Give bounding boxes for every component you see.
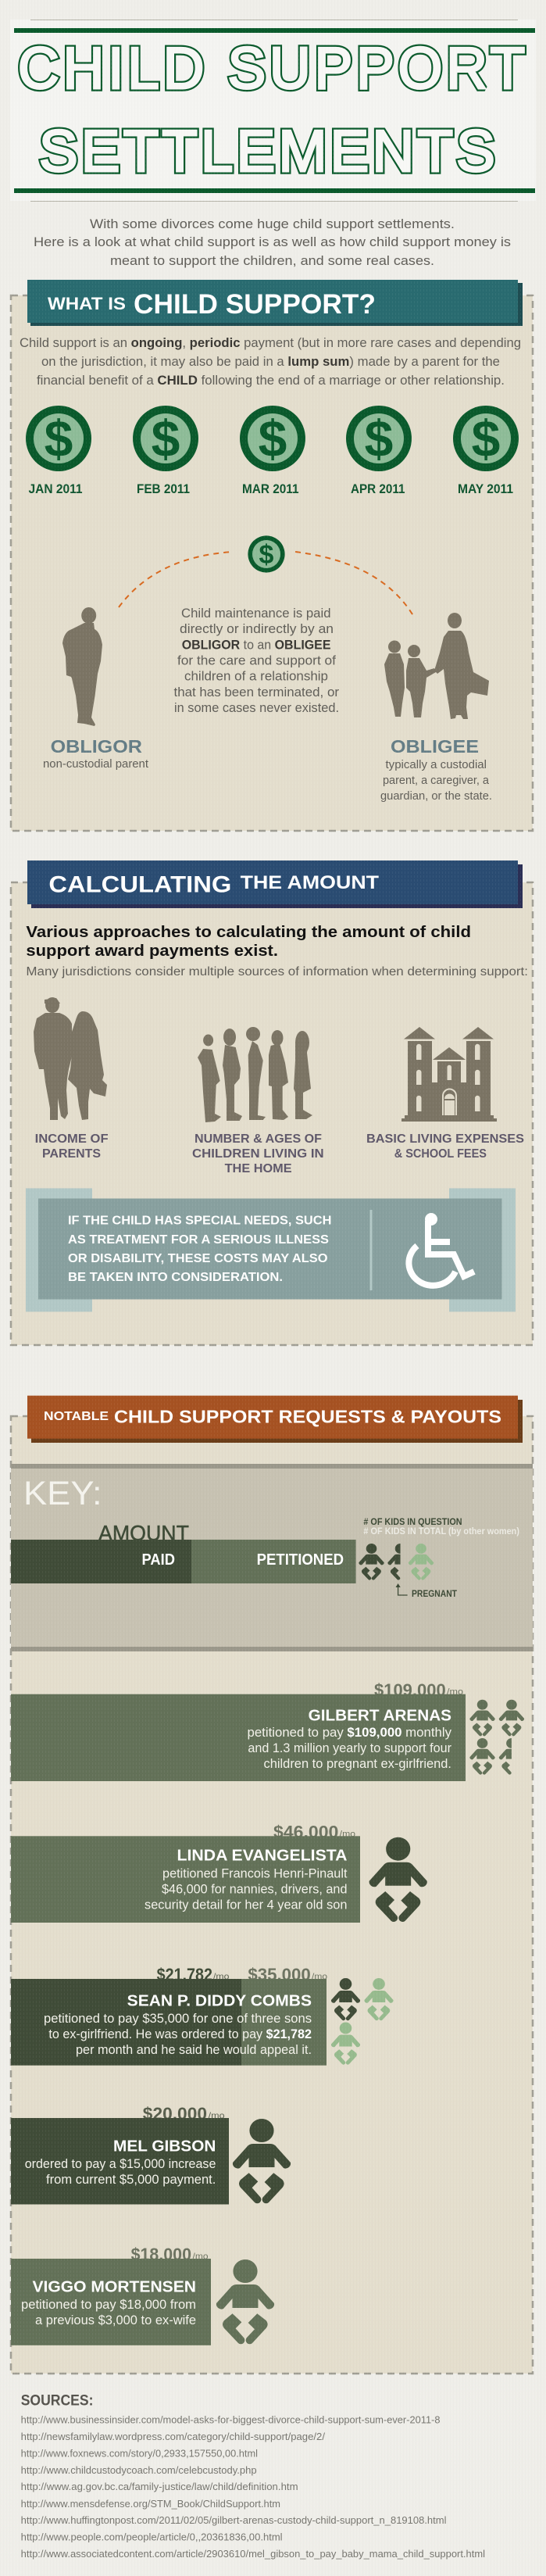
heading: notable payouts: CHILD SUPPORT REQUESTS & PAYOUTS — [114, 1407, 501, 1427]
case: mel gibson — [11, 2104, 291, 2204]
case: viggo mortensen: /mo — [192, 2252, 208, 2262]
pregnant callout — [395, 1583, 458, 1599]
callout: special needs — [26, 1188, 516, 1311]
key bar: PAID — [142, 1551, 175, 1569]
key bar — [11, 1540, 356, 1583]
definition text: on the jurisdiction, it may also be paid in a lump sum) made by a parent for the — [41, 355, 500, 369]
text: approaches: Various approaches to calculating the amount of child — [26, 924, 471, 941]
case: sean p. diddy combs: to ex-girlfriend. He was ordered to pay $21,782 — [48, 2027, 312, 2041]
title banner: SETTLEMENTS — [39, 118, 498, 184]
text: child maintenance: OBLIGOR to an OBLIGEE — [182, 638, 331, 652]
intro text: With some divorces come huge child support settlements. — [90, 216, 455, 231]
sources: http://www.childcustodycoach.com/celebcustody.php — [21, 2465, 257, 2476]
key babies — [359, 1544, 434, 1580]
icon: wheelchair — [409, 1213, 474, 1286]
case: linda evangelista: $46,000 for nannies, drivers, and — [162, 1882, 347, 1896]
case: linda evangelista: petitioned Francois Henri-Pinault — [162, 1866, 348, 1880]
title banner: CHILD SUPPORT — [18, 35, 529, 101]
labels: factors: & SCHOOL FEES — [394, 1147, 487, 1161]
definition text — [20, 336, 521, 388]
label: obligor: non-custodial parent — [43, 758, 148, 771]
key legend text: # OF KIDS IN TOTAL (by other women) — [363, 1526, 519, 1537]
sources: http://www.huffingtonpost.com/2011/02/05/gilbert-arenas-custody-child-support_n_819108.html — [21, 2515, 446, 2526]
label: obligee: guardian, or the state. — [380, 790, 492, 803]
text: child maintenance: children of a relationship — [184, 669, 328, 683]
text: child maintenance: directly or indirectly by an — [180, 622, 334, 636]
text: child maintenance: for the care and support of — [177, 653, 336, 667]
icon: obligor silhouette — [62, 607, 102, 726]
icon: baby — [369, 1837, 427, 1922]
icon: coin february — [133, 406, 198, 471]
intro text — [34, 216, 511, 268]
title banner — [10, 20, 536, 202]
label: obligee: typically a custodial — [386, 759, 487, 771]
month labels: JAN 2011 — [28, 482, 83, 496]
label: obligee: OBLIGEE — [391, 736, 479, 757]
case: linda evangelista: /mo — [340, 1830, 355, 1839]
icon: three babies — [331, 1978, 394, 2065]
icon: house — [401, 1027, 497, 1122]
label: obligor — [43, 736, 148, 771]
icon: small coin — [248, 535, 285, 573]
definition text: financial benefit of a CHILD following the end of a marriage or other relationship. — [37, 374, 505, 388]
title banner: CHILD SUPPORT — [18, 35, 529, 101]
case: gilbert arenas: and 1.3 million yearly to support four — [248, 1741, 451, 1755]
key legend text: # OF KIDS IN QUESTION — [363, 1516, 462, 1527]
heading: notable payouts: NOTABLE — [44, 1410, 109, 1423]
arrow: payment arc right — [295, 552, 415, 618]
sources: http://www.ag.gov.bc.ca/family-justice/law/child/definition.htm — [21, 2481, 298, 2492]
icon: small coin: $ — [259, 540, 274, 570]
case: gilbert arenas — [11, 1680, 524, 1781]
labels: factors: INCOME OF — [35, 1132, 109, 1146]
case: gilbert arenas: petitioned to pay $109,000 monthly — [247, 1726, 452, 1740]
icon: coin march — [240, 406, 305, 471]
case: sean p. diddy combs: per month and he said he would appeal it. — [76, 2043, 312, 2057]
heading: calculating the amount — [27, 860, 523, 908]
icon: coin january — [26, 406, 91, 471]
case: mel gibson: ordered to pay a $15,000 increase — [25, 2157, 216, 2171]
case: sean p. diddy combs: petitioned to pay $35,000 for one of three sons — [44, 2012, 312, 2026]
case: gilbert arenas: /mo — [447, 1687, 463, 1697]
callout: special needs: IF THE CHILD HAS SPECIAL NEEDS, SUCH — [68, 1215, 331, 1227]
case: gilbert arenas: children to pregnant ex-girlfriend. — [264, 1757, 451, 1771]
panel: notable requests and payouts — [11, 1396, 533, 2374]
case: linda evangelista: LINDA EVANGELISTA — [177, 1848, 347, 1865]
callout: special needs: BE TAKEN INTO CONSIDERATION. — [68, 1271, 283, 1284]
labels: factors — [35, 1132, 524, 1175]
text: child maintenance: Child maintenance is paid — [181, 606, 331, 621]
icon: obligee silhouette — [384, 613, 489, 719]
icon: parents silhouette — [34, 997, 107, 1120]
icon: baby — [233, 2119, 291, 2203]
month labels: MAR 2011 — [242, 482, 298, 496]
intro text: Here is a look at what child support is as well as how child support money is — [34, 234, 511, 249]
case: sean p. diddy combs: $21,782 — [157, 1965, 212, 1984]
labels: factors: THE HOME — [225, 1162, 292, 1175]
heading: what is child support: WHAT IS — [48, 294, 126, 313]
callout: special needs: AS TREATMENT FOR A SERIOUS ILLNESS — [68, 1233, 329, 1247]
case: gilbert arenas: $109,000 — [374, 1680, 446, 1700]
text: approaches — [26, 924, 528, 979]
case: sean p. diddy combs: $35,000 — [248, 1965, 311, 1984]
case: sean p. diddy combs: /mo — [312, 1973, 327, 1982]
case: sean p. diddy combs: /mo — [213, 1973, 229, 1982]
month labels: MAY 2011 — [458, 482, 513, 496]
icon: children silhouettes — [198, 1027, 312, 1122]
sources — [21, 2393, 485, 2560]
icon: four babies — [469, 1700, 524, 1775]
key panel: KEY: — [23, 1475, 102, 1512]
heading: what is child support: CHILD SUPPORT? — [134, 289, 376, 320]
key bar: PETITIONED — [257, 1551, 344, 1569]
sources: http://www.mensdefense.org/STM_Book/ChildSupport.htm — [21, 2499, 280, 2510]
pregnant callout: PREGNANT — [412, 1588, 458, 1599]
heading: calculating the amount: THE AMOUNT — [241, 872, 379, 893]
text: child maintenance — [173, 606, 340, 715]
case: mel gibson: from current $5,000 payment. — [46, 2173, 216, 2187]
case: sean p. diddy combs: SEAN P. DIDDY COMBS — [127, 1993, 312, 2010]
text: approaches: support award payments exist. — [26, 943, 278, 960]
case: viggo mortensen: a previous $3,000 to ex-wife — [35, 2313, 196, 2327]
case: viggo mortensen: $18,000 — [131, 2245, 191, 2264]
label: obligee: parent, a caregiver, a — [383, 775, 490, 787]
month labels — [28, 482, 513, 496]
case: linda evangelista: $46,000 — [273, 1823, 338, 1841]
key panel — [11, 1464, 533, 1651]
month labels: FEB 2011 — [137, 482, 190, 496]
sources: SOURCES: — [21, 2393, 94, 2410]
icon: baby — [216, 2259, 274, 2344]
case: linda evangelista: security detail for her 4 year old son — [145, 1898, 347, 1912]
case: viggo mortensen — [11, 2245, 274, 2345]
heading: calculating the amount: CALCULATING — [48, 872, 231, 898]
icon: coin may — [453, 406, 519, 471]
sources: http://www.businessinsider.com/model-asks-for-biggest-divorce-child-support-sum-ever-2011-8 — [21, 2415, 441, 2426]
labels: factors: BASIC LIVING EXPENSES — [366, 1132, 524, 1146]
text: child maintenance: in some cases never existed. — [174, 701, 339, 715]
text: child maintenance: that has been terminated, or — [173, 685, 340, 699]
icon: coin april — [346, 406, 412, 471]
case: mel gibson: /mo — [209, 2112, 225, 2121]
sources: http://www.people.com/people/article/0,,20361836,00.html — [21, 2532, 283, 2543]
text: approaches: Many jurisdictions consider multiple sources of information when determining support: — [26, 965, 528, 979]
key legend text — [363, 1516, 519, 1537]
heading: what is child support — [27, 280, 523, 326]
labels: factors: NUMBER & AGES OF — [194, 1132, 322, 1146]
labels: factors: PARENTS — [42, 1147, 101, 1161]
case: mel gibson: $20,000 — [143, 2104, 207, 2123]
label: obligee — [380, 736, 492, 803]
case: linda evangelista — [11, 1823, 427, 1923]
case: gilbert arenas: GILBERT ARENAS — [309, 1707, 451, 1724]
labels: factors: CHILDREN LIVING IN — [192, 1147, 324, 1161]
panel: calculating the amount — [11, 860, 533, 1345]
sources: http://www.foxnews.com/story/0,2933,157550,00.html — [21, 2448, 258, 2459]
key panel: AMOUNT — [98, 1521, 189, 1545]
sources: http://www.associatedcontent.com/article/2903610/mel_gibson_to_pay_baby_mama_child_support.html — [21, 2549, 485, 2560]
heading: notable payouts — [27, 1396, 523, 1443]
label: obligor: OBLIGOR — [51, 736, 142, 757]
sources: http://newsfamilylaw.wordpress.com/category/child-support/page/2/ — [21, 2431, 326, 2442]
callout: special needs: OR DISABILITY, THESE COSTS MAY ALSO — [68, 1252, 328, 1265]
case: mel gibson: MEL GIBSON — [113, 2138, 216, 2156]
case: viggo mortensen: petitioned to pay $18,000 from — [21, 2298, 196, 2312]
case: sean p. diddy combs — [11, 1965, 394, 2066]
intro text: meant to support the children, and some real cases. — [110, 253, 434, 268]
definition text: Child support is an ongoing, periodic payment (but in more rare cases and depending — [20, 336, 521, 350]
panel: what is child support — [11, 280, 533, 831]
arrow: payment arc left — [119, 552, 234, 607]
case: viggo mortensen: VIGGO MORTENSEN — [33, 2279, 196, 2296]
month labels: APR 2011 — [351, 482, 405, 496]
title banner: SETTLEMENTS — [39, 118, 498, 184]
